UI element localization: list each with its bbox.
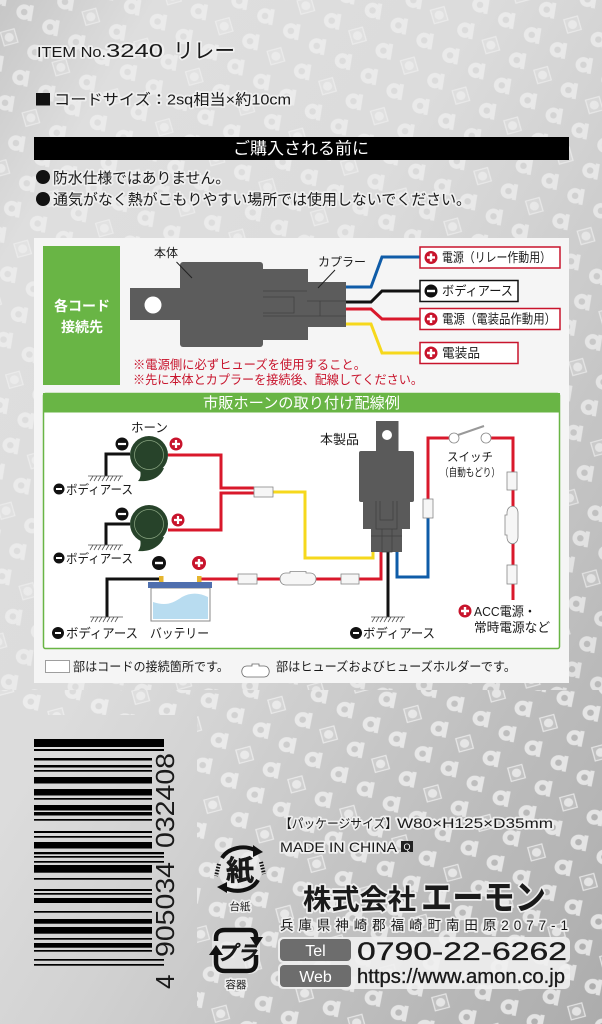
- relay product: [359, 421, 414, 552]
- battery: バッテリー: [150, 626, 209, 641]
- green label: each cord destination: [43, 246, 120, 385]
- website: [278, 963, 570, 989]
- barcode digits: 032408: [150, 753, 180, 848]
- panel frame and heading: [43, 393, 560, 648]
- package size and origin: [280, 815, 553, 855]
- icon: paper recycling mark: [216, 845, 264, 913]
- switch: （自動もどり）: [440, 465, 500, 479]
- address: 兵庫県神崎郡福崎町南田原2077-1: [280, 918, 568, 933]
- phone: Tel: [305, 943, 326, 960]
- earth and horn labels: ボディアース: [66, 482, 133, 497]
- icon: plastic recycling mark: プラ: [217, 942, 258, 965]
- label: accessory: [420, 342, 518, 364]
- earth and horn labels: ボディアース: [66, 551, 133, 566]
- label: accessory: 電装品: [442, 346, 480, 360]
- horn: lower: [130, 505, 168, 551]
- switch: [440, 426, 500, 479]
- labels: body and coupler: [154, 246, 366, 288]
- switch: スイッチ: [447, 450, 493, 464]
- label: power relay: [420, 247, 560, 268]
- notice list: [36, 170, 471, 208]
- title: リレー: [173, 40, 235, 63]
- green label: each cord destination: 各コード: [54, 298, 110, 314]
- icon: paper recycling mark: 台紙: [230, 900, 251, 913]
- notice bar: before purchase: [34, 137, 569, 160]
- company name: [303, 879, 546, 918]
- earth and horn labels: ホーン: [131, 421, 168, 435]
- ground symbols: [88, 476, 405, 622]
- notice bar: before purchase: ご購入される前に: [233, 139, 369, 158]
- ACC power label: ACC電源・: [474, 604, 536, 619]
- icon: plastic recycling mark: 容器: [226, 978, 247, 991]
- phone: [278, 937, 570, 966]
- earth and horn labels: [52, 421, 435, 641]
- package size and origin: W80×H125×D35mm: [397, 815, 553, 831]
- barcode digits: 4: [150, 975, 180, 989]
- panel: wiring: [34, 238, 569, 683]
- ACC power label: [458, 604, 550, 635]
- horn: upper: [130, 436, 168, 481]
- panel frame and heading: 市販ホーンの取り付け配線例: [203, 395, 400, 412]
- label: body earth: [420, 280, 518, 302]
- title: [37, 40, 235, 63]
- legend: connector and fuse: 部はコードの接続箇所です。: [73, 659, 229, 674]
- relay illustration: [130, 262, 346, 347]
- title: 3240: [106, 40, 163, 61]
- phone: 0790-22-6262: [357, 938, 567, 966]
- barcode: [34, 739, 164, 966]
- company name: 株式会社: [303, 884, 416, 915]
- title: ITEM No.: [37, 44, 106, 61]
- website: https://www.amon.co.jp: [357, 965, 565, 988]
- panel: cord connections: [43, 246, 560, 387]
- icon: plastic recycling mark: [209, 928, 263, 991]
- legend: connector and fuse: 部はヒューズおよびヒューズホルダーです。: [276, 659, 516, 674]
- earth and horn labels: ボディアース: [363, 626, 435, 641]
- fuses: [280, 506, 518, 585]
- label: power accessory: [420, 308, 560, 330]
- wires: [106, 438, 513, 617]
- battery: [148, 556, 212, 641]
- label: body earth: ボディアース: [442, 284, 513, 298]
- label: power relay: 電源（リレー作動用）: [442, 250, 551, 265]
- earth and horn labels: ボディアース: [66, 626, 138, 641]
- package size and origin: 【パッケージサイズ】: [280, 816, 397, 831]
- barcode digits: 905034: [150, 862, 180, 957]
- labels: body and coupler: 本体: [154, 246, 178, 260]
- notice list: 防水仕様ではありません。: [53, 170, 230, 187]
- red caution notes: ※電源側に必ずヒューズを使用すること。: [133, 357, 366, 372]
- package size and origin: MADE IN CHINA: [280, 839, 398, 855]
- panel: horn wiring example: [43, 393, 560, 648]
- package size and origin: Q: [403, 842, 411, 852]
- horn signs: [116, 438, 184, 526]
- green label: each cord destination: 接続先: [61, 319, 103, 335]
- label: power accessory: 電源（電装品作動用）: [442, 312, 556, 326]
- icon: paper recycling mark: 紙: [226, 855, 254, 886]
- red caution notes: [133, 357, 423, 387]
- wires to labels: [346, 257, 420, 353]
- ACC power label: 常時電源など: [474, 620, 550, 635]
- notice list: 通気がなく熱がこもりやすい場所では使用しないでください。: [53, 192, 471, 208]
- website: Web: [299, 969, 332, 986]
- label: this product: 本製品: [320, 432, 359, 447]
- connectors: [238, 472, 517, 584]
- legend: connector and fuse: [46, 659, 516, 677]
- red caution notes: ※先に本体とカプラーを接続後、配線してください。: [133, 372, 423, 387]
- barcode digits: [150, 753, 180, 989]
- cord size spec: コードサイズ：2sq相当×約10cm: [54, 92, 291, 108]
- company name: エーモン: [421, 879, 546, 918]
- labels: body and coupler: カプラー: [318, 255, 366, 269]
